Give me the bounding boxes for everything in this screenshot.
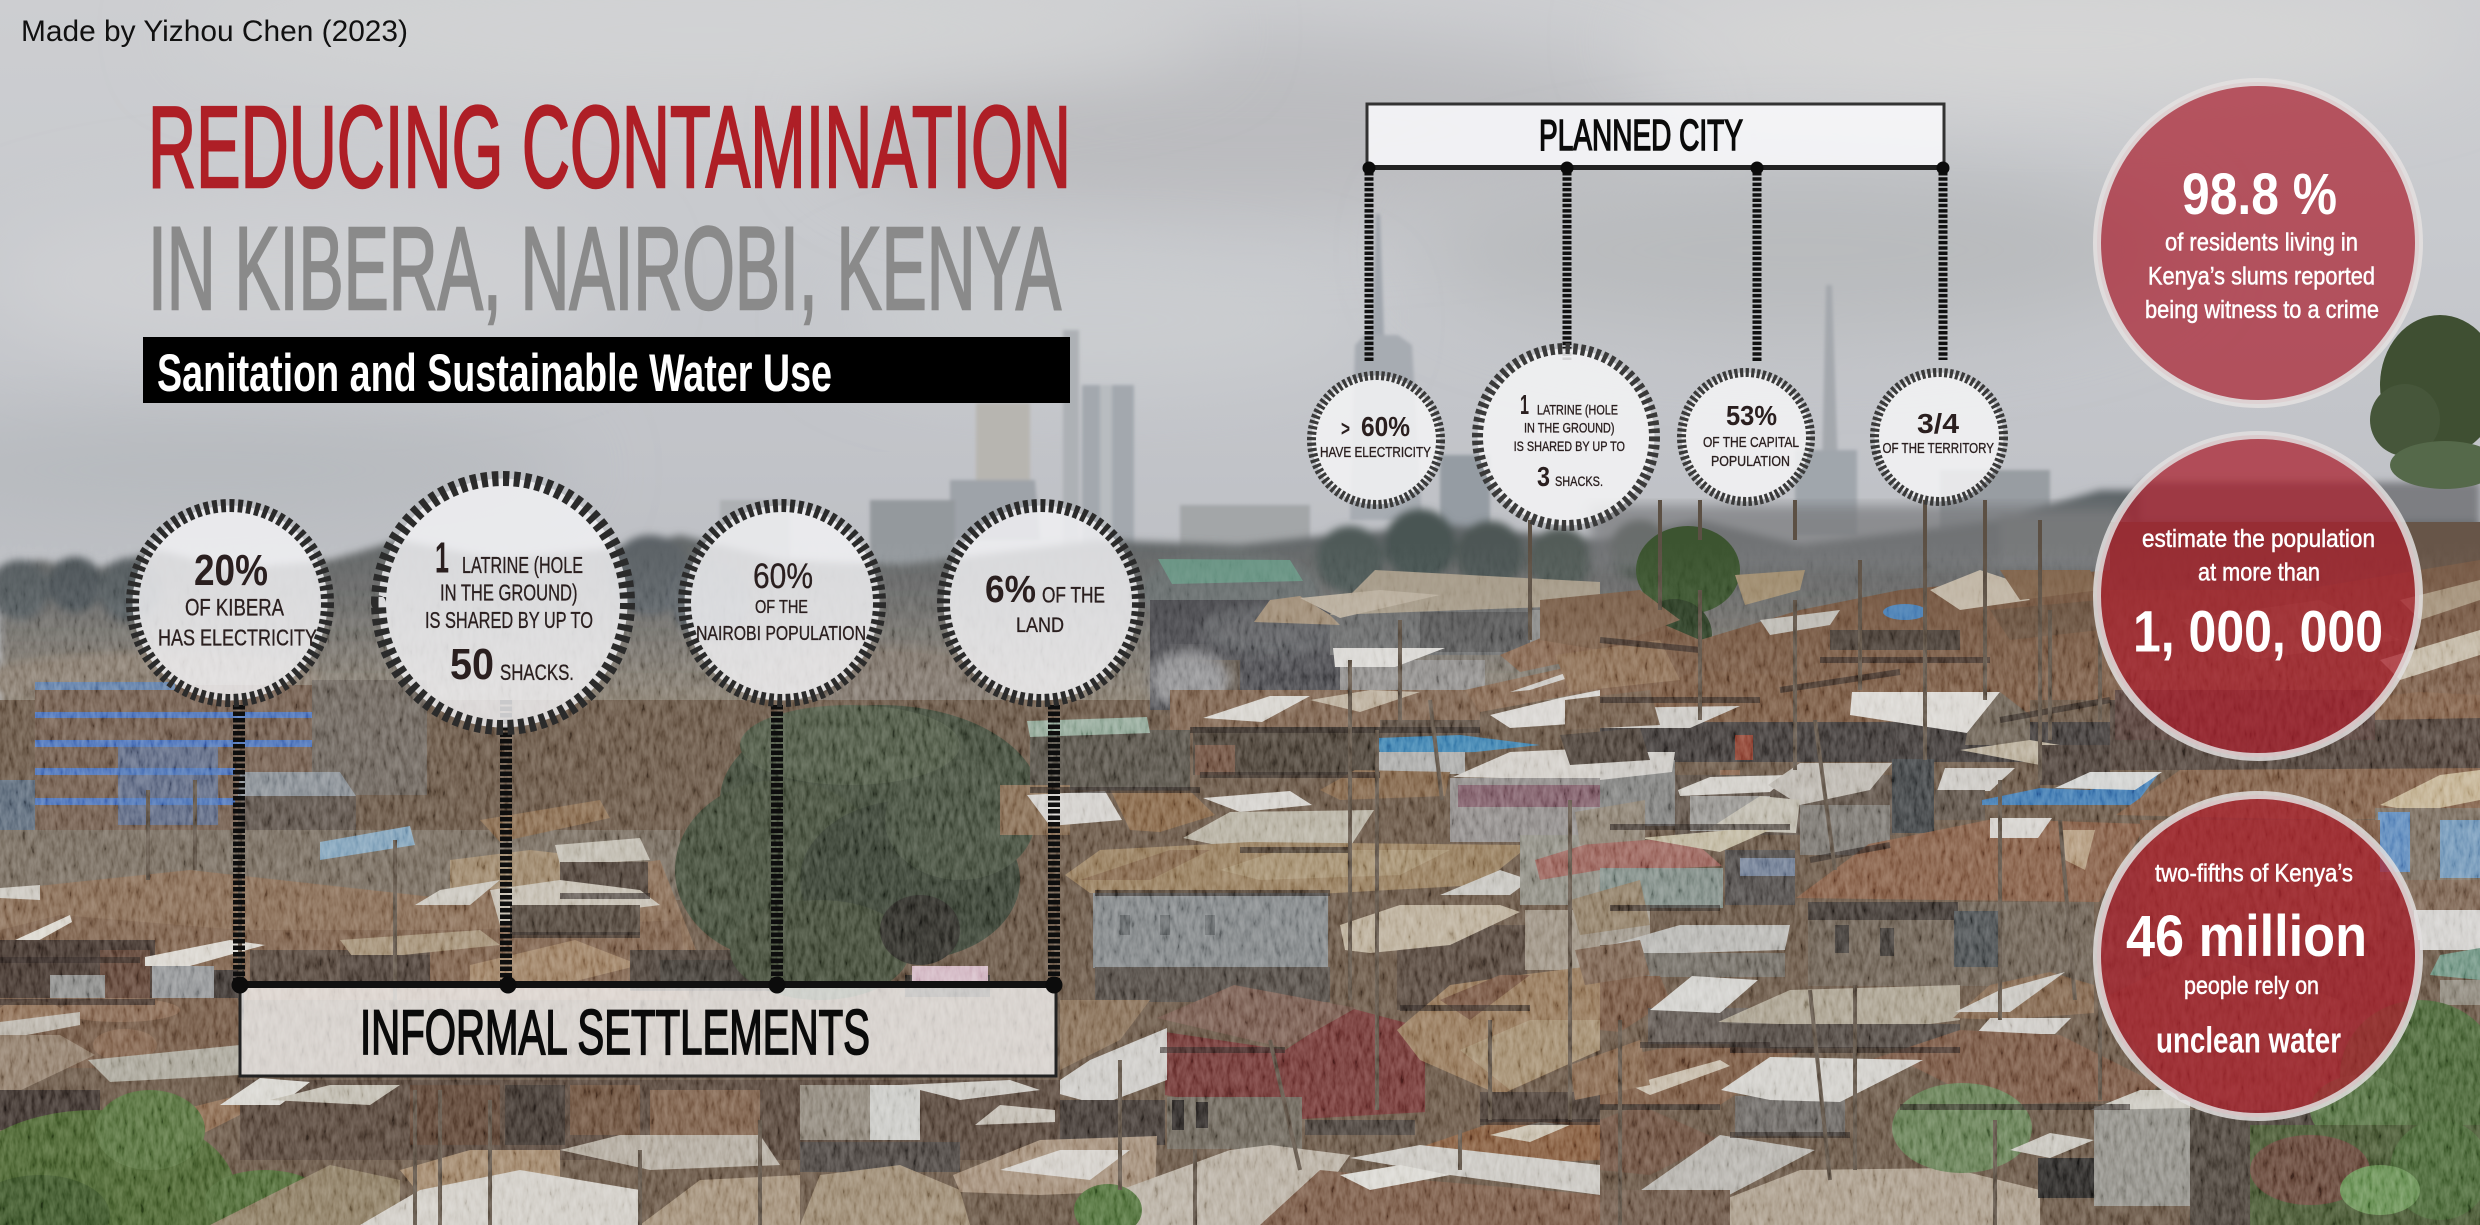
stat circle: latrine shared by 3 shacks: 1 [1520, 389, 1529, 420]
planned city chart [1312, 104, 2004, 526]
stat circle: 3/4 of territory [1874, 372, 2004, 502]
stat circle: 20% electricity: HAS ELECTRICITY [158, 624, 317, 650]
gray roof building [238, 772, 356, 834]
stat circle: 3/4 of territory: 3/4 [1917, 408, 1959, 439]
stat circle: latrine shared by 50 shacks: SHACKS. [500, 660, 574, 685]
right column area behind red circles [2100, 522, 2480, 1100]
right-of-centre roofs and walls [1340, 835, 1600, 1010]
stat circle: 6% of the land: OF THE [1042, 582, 1105, 608]
fact circle: 46 million rely on unclean water: people rely on [2184, 972, 2319, 1000]
white roofs, lower centre right [1600, 925, 2094, 1048]
stat circle: 60% of Nairobi population [684, 506, 880, 700]
fact circle: 46 million rely on unclean water [2097, 795, 2419, 1117]
subtitle bar: Sanitation and Sustainable Water Use [157, 344, 832, 403]
roof shadow lines [0, 640, 2130, 1135]
fact circle: 46 million rely on unclean water: unclean water [2156, 1020, 2341, 1061]
fact circle: population over 1,000,000: estimate the population [2142, 525, 2375, 553]
photo grain texture [0, 540, 2480, 1225]
utility poles [148, 500, 2100, 1225]
stat circle: over 60% have electricity: HAVE ELECTRICITY [1320, 444, 1431, 461]
long roofs center top [1254, 570, 1600, 655]
hazy hills and far trees [0, 482, 2480, 720]
stat circle: 6% of the land [944, 506, 1138, 700]
stat circle: 53% of capital population: POPULATION [1711, 453, 1790, 470]
informal settlements label box: INFORMAL SETTLEMENTS [360, 998, 870, 1068]
dark brick houses center [1027, 717, 1480, 790]
blue apartment block [0, 682, 320, 840]
white slanted roof by house [1045, 1000, 1167, 1145]
title line 1: REDUCING CONTAMINATION [148, 82, 1071, 212]
concrete frame building [312, 680, 427, 795]
stat circle: latrine shared by 3 shacks [1478, 348, 1654, 526]
rows of rust and white roofs, centre [1000, 785, 1530, 895]
fact circle: population over 1,000,000: at more than [2198, 559, 2320, 587]
stat circle: over 60% have electricity: > [1341, 416, 1350, 441]
stat circle: latrine shared by 3 shacks: 3 [1537, 461, 1550, 492]
red corrugated house [1157, 985, 1425, 1149]
stat circle: latrine shared by 50 shacks: IS SHARED BY UP TO [425, 607, 593, 633]
fact circle: 98.8% witness to a crime: of residents living in [2165, 229, 2358, 257]
stat circle: latrine shared by 3 shacks: IN THE GROUND) [1524, 420, 1614, 436]
fact circle: population over 1,000,000 [2097, 435, 2419, 757]
stat circle: latrine shared by 50 shacks: 1 [435, 534, 449, 583]
right field of rust roofs [1600, 570, 2110, 725]
foreground rust roofs, lower right [1600, 1030, 2330, 1225]
stat circle: over 60% have electricity: 60% [1361, 411, 1410, 442]
informal settlements label box [232, 976, 1062, 1076]
red fact circles column [2097, 82, 2419, 1117]
stat circle: 53% of capital population [1682, 372, 1810, 502]
shacks below the informal settlements box [220, 1078, 1060, 1172]
stat circle: 53% of capital population: 53% [1726, 400, 1777, 431]
stat circle: latrine shared by 50 shacks [378, 478, 628, 728]
tree, far right skyline [2370, 315, 2480, 489]
stat circle: latrine shared by 3 shacks: SHACKS. [1555, 473, 1603, 489]
stat circle: 6% of the land: LAND [1016, 614, 1064, 637]
dashed connector lines [239, 700, 1054, 985]
rocks and sacks at lower left [0, 998, 240, 1068]
planned city label box [1362, 104, 1950, 174]
stat circle: 60% of Nairobi population: OF THE [755, 597, 808, 617]
stat circle: latrine shared by 50 shacks: IN THE GROUND) [440, 580, 578, 606]
gray building with windows [1093, 893, 1330, 1002]
green-roof house and hazy middle [1150, 559, 1350, 710]
stat circle: 6% of the land: 6% [985, 569, 1036, 611]
big white roof and dark row [1600, 692, 2110, 800]
stat circle: 60% of Nairobi population: 60% [753, 557, 813, 596]
shacks above the informal settlements box [0, 930, 775, 1020]
stat circle: 20% electricity: 20% [194, 546, 268, 595]
stat circle: 60% of Nairobi population: NAIROBI POPULATION [696, 623, 866, 645]
mid-left dusty terrain and roofs [0, 800, 700, 1000]
fact circle: 98.8% witness to a crime: being witness to a crime [2145, 296, 2379, 324]
title line 2: IN KIBERA, NAIROBI, KENYA [148, 203, 1061, 335]
bush, lower left [0, 1090, 325, 1225]
fact circle: 98.8% witness to a crime [2097, 82, 2419, 404]
distant skyline towers [720, 214, 2050, 590]
stat circle: 20% electricity [132, 506, 328, 700]
right middle rows with blue tarp and laundry [1320, 625, 1600, 842]
informal settlements chart [132, 478, 1138, 1076]
sky with clouds [0, 0, 2480, 720]
stat circle: 53% of capital population: OF THE CAPITAL [1703, 434, 1799, 451]
fact circle: 46 million rely on unclean water: 46 million [2126, 904, 2367, 969]
centre-right white strip roofs [1600, 752, 2162, 855]
white roof house [1170, 648, 1485, 730]
stat circle: latrine shared by 50 shacks: 50 [450, 640, 494, 689]
small tree near right centre [1636, 526, 1740, 671]
pink roof house with teal wall [1600, 830, 1795, 945]
fact circle: 46 million rely on unclean water: two-fifths of Kenya’s [2155, 860, 2353, 888]
lower-left roofs [0, 1035, 240, 1135]
ground base of the settlement [0, 700, 2480, 1225]
title block [143, 82, 1071, 403]
dashed connector lines [1369, 172, 1943, 362]
fact circle: population over 1,000,000: 1, 000, 000 [2133, 600, 2383, 665]
fact circle: 98.8% witness to a crime: Kenya’s slums reported [2148, 262, 2375, 290]
stat circle: latrine shared by 3 shacks: IS SHARED BY UP TO [1514, 438, 1625, 454]
stat circle: latrine shared by 3 shacks: LATRINE (HOLE [1537, 401, 1618, 417]
stat circle: 20% electricity: OF KIBERA [185, 594, 284, 622]
bottom row roofs, centre right [1260, 965, 1600, 1225]
large central tree [660, 705, 1040, 1000]
roofs bridging the middle and right rows [1540, 590, 1680, 1100]
bottom row roofs, left and centre [210, 1135, 1350, 1225]
hazy poles zone, upper right [1590, 505, 2120, 570]
stat circle: 3/4 of territory: OF THE TERRITORY [1882, 440, 1994, 457]
credit line: Made by Yizhou Chen (2023) [21, 15, 408, 48]
large rust roof building [1796, 818, 2147, 986]
stat circle: latrine shared by 50 shacks: LATRINE (HOLE [462, 552, 583, 578]
planned city label box: PLANNED CITY [1539, 111, 1743, 160]
stat circle: over 60% have electricity [1312, 376, 1440, 504]
bushes, lower right [2250, 1000, 2480, 1225]
fact circle: 98.8% witness to a crime: 98.8 % [2182, 162, 2337, 227]
